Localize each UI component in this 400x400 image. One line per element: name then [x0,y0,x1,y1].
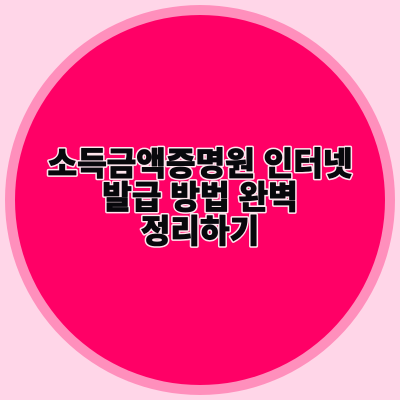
title: 발급 방법 완벽 [102,180,298,216]
title: 발급 방법 완벽 [102,180,298,216]
title: 소득금액증명원 인터넷 [47,146,353,182]
title: 정리하기 [141,214,259,250]
title: 소득금액증명원 인터넷 [47,146,353,182]
title [47,146,353,250]
title: 정리하기 [141,214,259,250]
